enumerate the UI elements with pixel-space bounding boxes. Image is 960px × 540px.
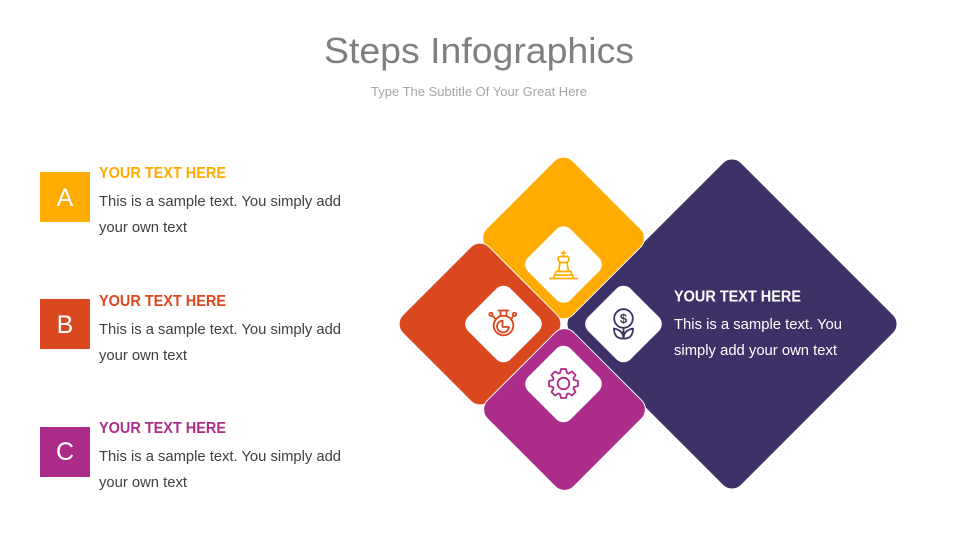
badge C: C	[56, 438, 74, 466]
purple panel text	[674, 288, 842, 359]
badge C	[40, 427, 90, 477]
text B: your own text	[99, 347, 188, 364]
icon: money plant: $	[620, 311, 628, 326]
purple heading: YOUR TEXT HERE	[674, 288, 801, 306]
heading A: YOUR TEXT HERE	[99, 165, 226, 182]
title: Steps Infographics	[324, 30, 634, 71]
purple body: simply add your own text	[674, 342, 838, 359]
text C: This is a sample text. You simply add	[99, 448, 341, 465]
purple body: This is a sample text. You	[674, 316, 842, 333]
white tile: yellow	[521, 222, 606, 307]
text B: This is a sample text. You simply add	[99, 321, 341, 338]
icon: chess king	[549, 250, 578, 278]
item B	[40, 293, 341, 364]
badge B	[40, 299, 90, 349]
badge B: B	[57, 311, 73, 339]
diamond: purple	[562, 154, 902, 494]
icon: gear	[549, 369, 578, 398]
heading C: YOUR TEXT HERE	[99, 420, 226, 437]
white tile: red	[461, 282, 546, 366]
text A: your own text	[99, 219, 188, 236]
diamond: red	[394, 238, 566, 410]
diamond cluster	[394, 152, 902, 496]
item A	[40, 165, 341, 236]
icon: stopwatch	[489, 310, 516, 335]
text C: your own text	[99, 474, 188, 491]
diamond: yellow	[477, 152, 650, 324]
icon: money plant	[614, 309, 633, 339]
badge A	[40, 172, 90, 222]
text A: This is a sample text. You simply add	[99, 193, 341, 210]
subtitle: Type The Subtitle Of Your Great Here	[371, 84, 587, 99]
white tile: purple	[581, 282, 666, 366]
item C	[40, 420, 341, 491]
white tile: magenta	[521, 342, 606, 426]
diamond: magenta	[478, 323, 651, 496]
badge A: A	[57, 184, 74, 212]
heading B: YOUR TEXT HERE	[99, 293, 226, 310]
